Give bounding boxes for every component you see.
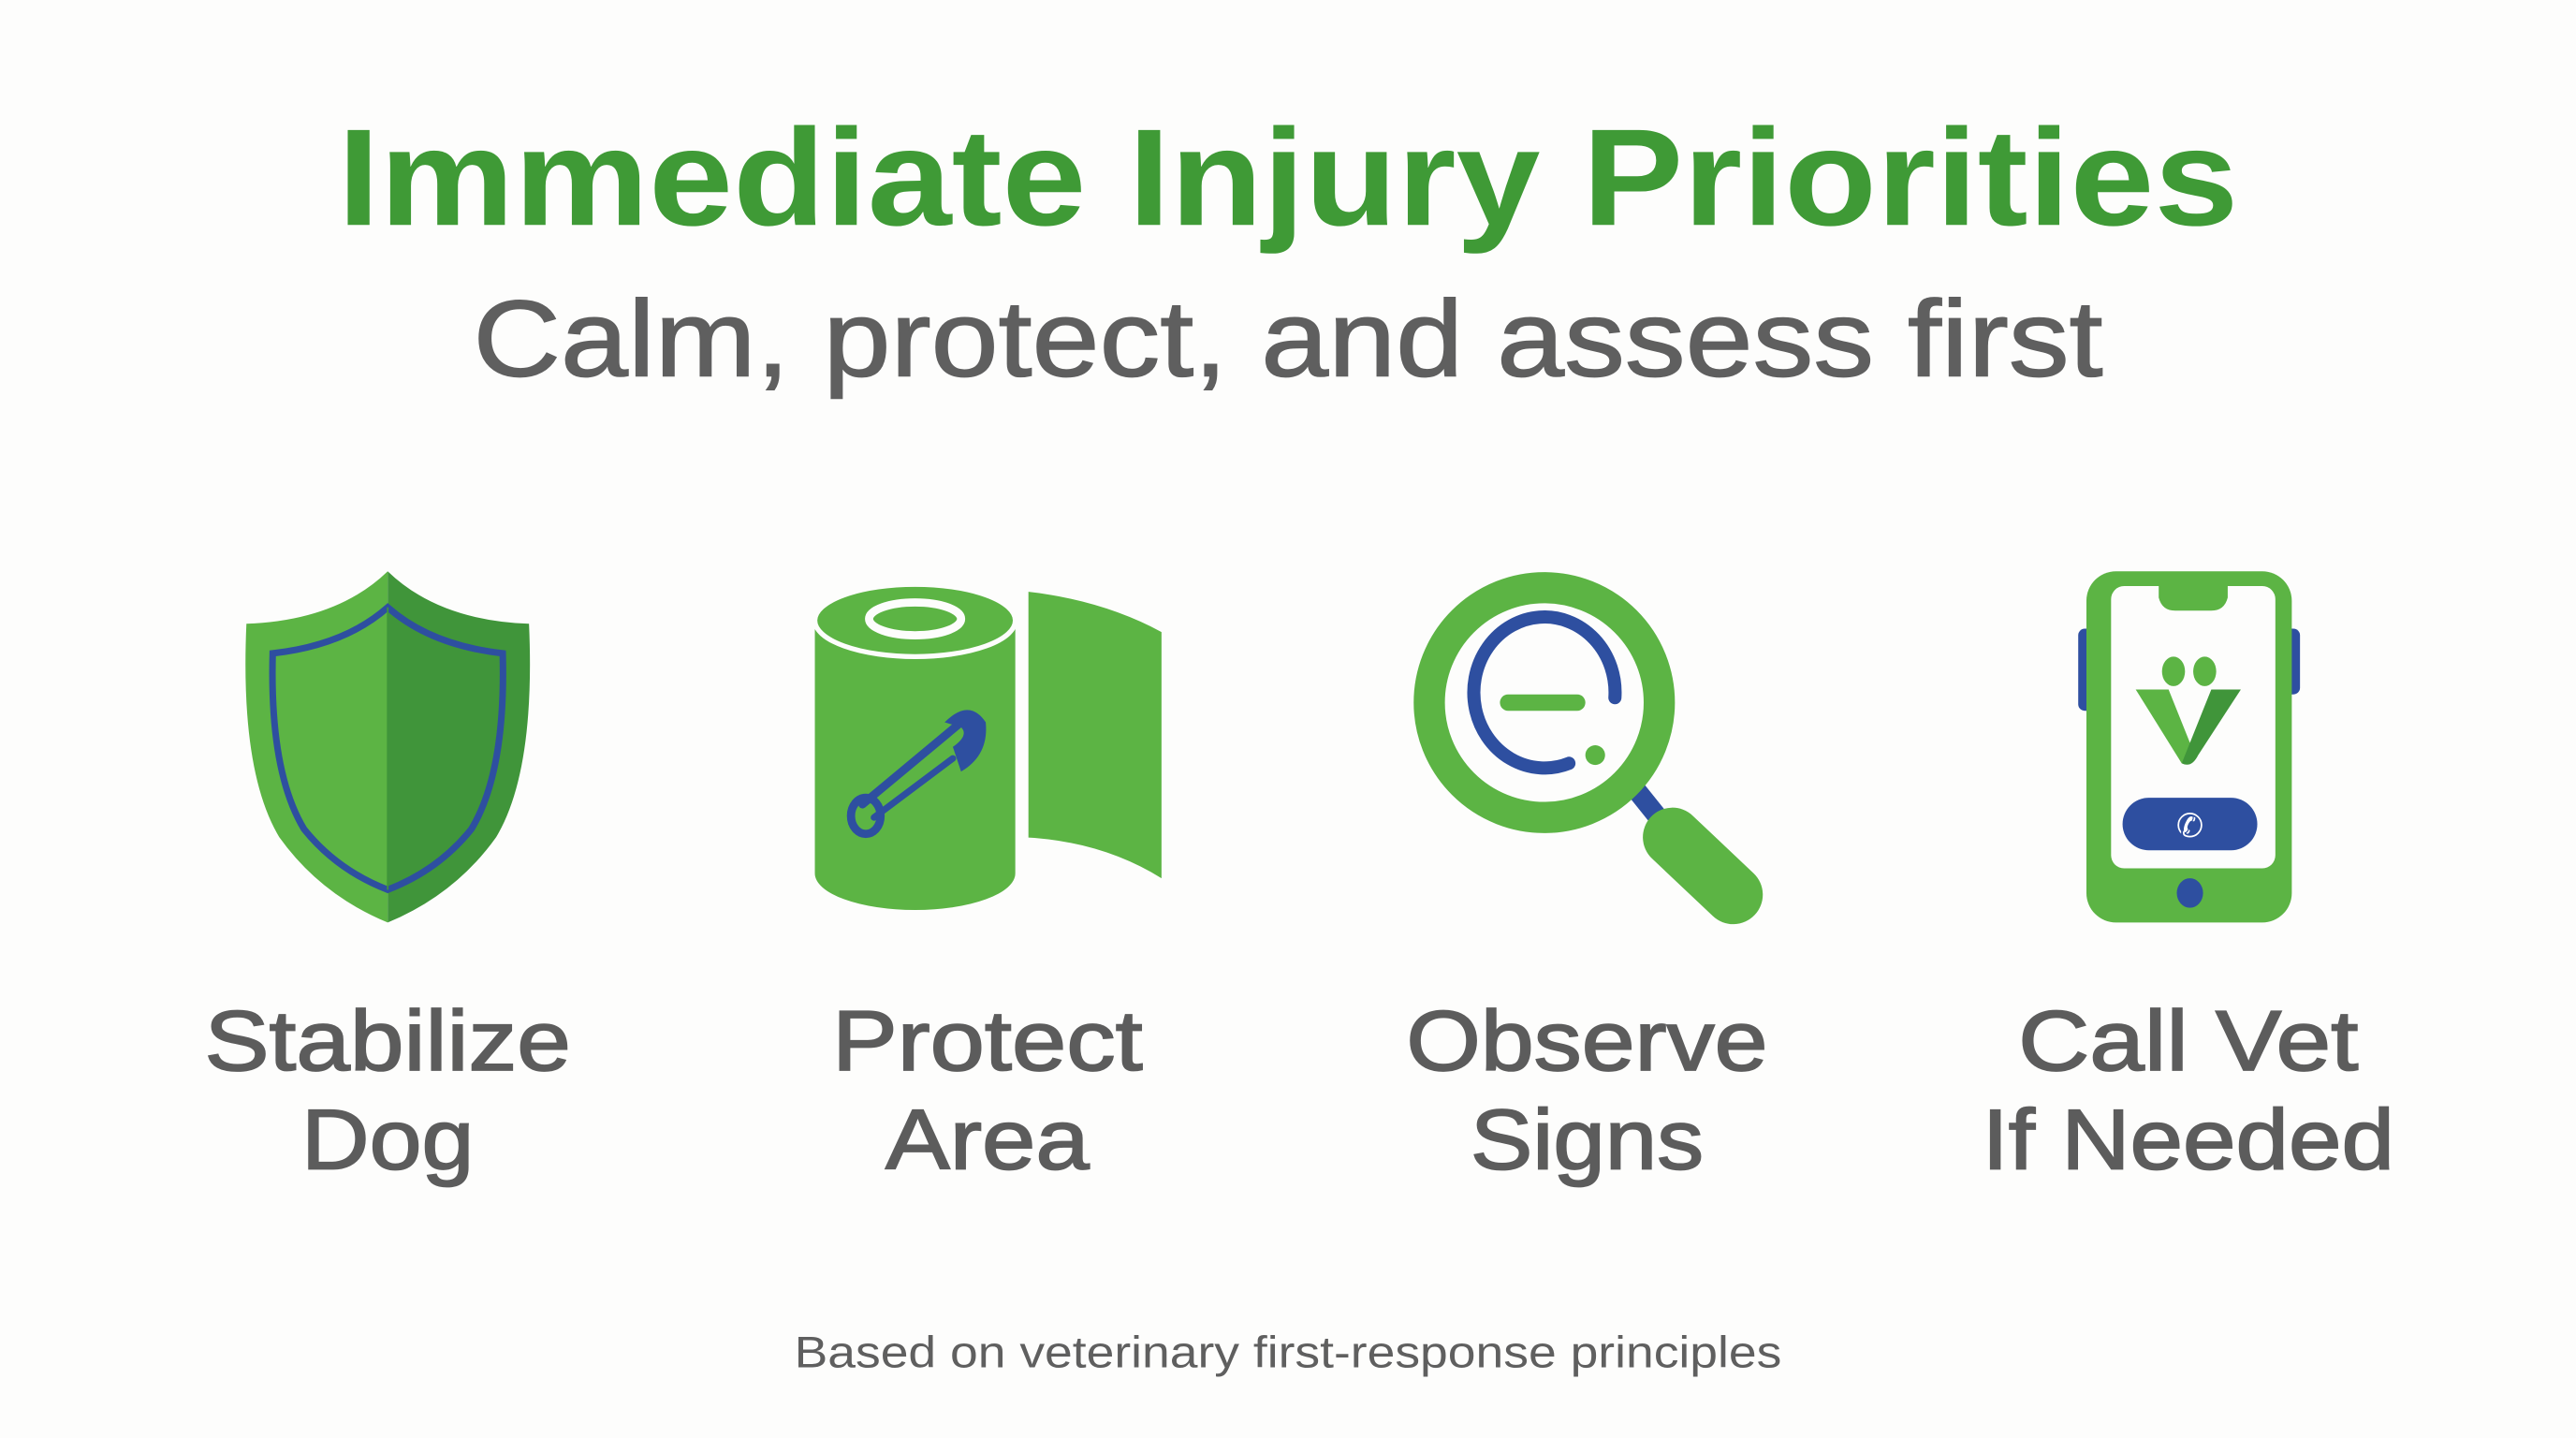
label: Observe Signs <box>1406 993 1767 1187</box>
label: Protect Area: Area <box>886 1092 1090 1187</box>
label: Stabilize Dog <box>205 993 571 1187</box>
icon: phone <box>2078 571 2300 922</box>
subtitle: Calm, protect, and assess first <box>473 278 2103 400</box>
icon: phone: ✆ <box>2176 808 2203 844</box>
label: Protect Area: Protect <box>832 993 1143 1089</box>
label: Observe Signs: Observe <box>1406 993 1767 1089</box>
label: Stabilize Dog: Stabilize <box>205 993 571 1089</box>
label: Call Vet If Needed <box>1983 993 2394 1187</box>
safety pin <box>851 723 961 834</box>
label: Call Vet If Needed: Call Vet <box>2018 993 2358 1089</box>
label: Stabilize Dog: Dog <box>301 1092 474 1187</box>
footer: Based on veterinary first-response principles <box>795 1328 1781 1378</box>
label: Call Vet If Needed: If Needed <box>1983 1092 2394 1187</box>
icon: magnifier <box>1429 588 1734 895</box>
icon: shield <box>245 571 530 922</box>
label: Protect Area <box>832 993 1143 1187</box>
title: Immediate Injury Priorities <box>338 101 2238 255</box>
label: Observe Signs: Signs <box>1471 1092 1704 1187</box>
icon: bandage roll <box>815 584 1162 910</box>
